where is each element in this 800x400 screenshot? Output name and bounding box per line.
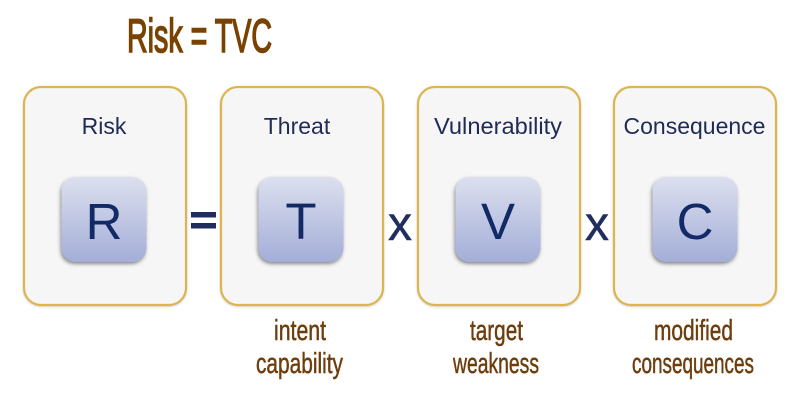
operator: times: x	[388, 198, 412, 251]
caption: vulnerability	[452, 315, 539, 380]
icon: letter R: R	[86, 193, 122, 250]
title: Risk = TVC	[127, 9, 272, 62]
icon: letter T: T	[285, 193, 317, 250]
panel: risk	[24, 87, 186, 305]
label: vulnerability: Vulnerability	[434, 113, 563, 139]
icon: letter R	[62, 177, 146, 262]
label: risk: Risk	[82, 113, 127, 139]
icon: letter C: C	[677, 193, 713, 250]
icon: letter C	[652, 177, 738, 262]
caption: vulnerability: target	[470, 315, 523, 347]
panel: vulnerability	[418, 87, 580, 305]
caption: threat: intent	[274, 315, 326, 347]
caption: threat	[256, 315, 343, 380]
operator: equals	[191, 212, 216, 228]
panel: threat	[221, 87, 383, 305]
operator: times: x	[585, 198, 609, 251]
caption: threat: capability	[256, 348, 343, 380]
caption: consequence: modified	[654, 315, 733, 347]
label: consequence: Consequence	[624, 113, 765, 139]
icon: letter V: V	[481, 193, 515, 250]
icon: letter T	[258, 177, 344, 262]
icon: letter V	[456, 177, 540, 262]
caption: consequence	[632, 315, 754, 380]
panel: consequence	[614, 87, 776, 305]
label: threat: Threat	[264, 113, 331, 139]
caption: vulnerability: weakness	[452, 348, 539, 380]
